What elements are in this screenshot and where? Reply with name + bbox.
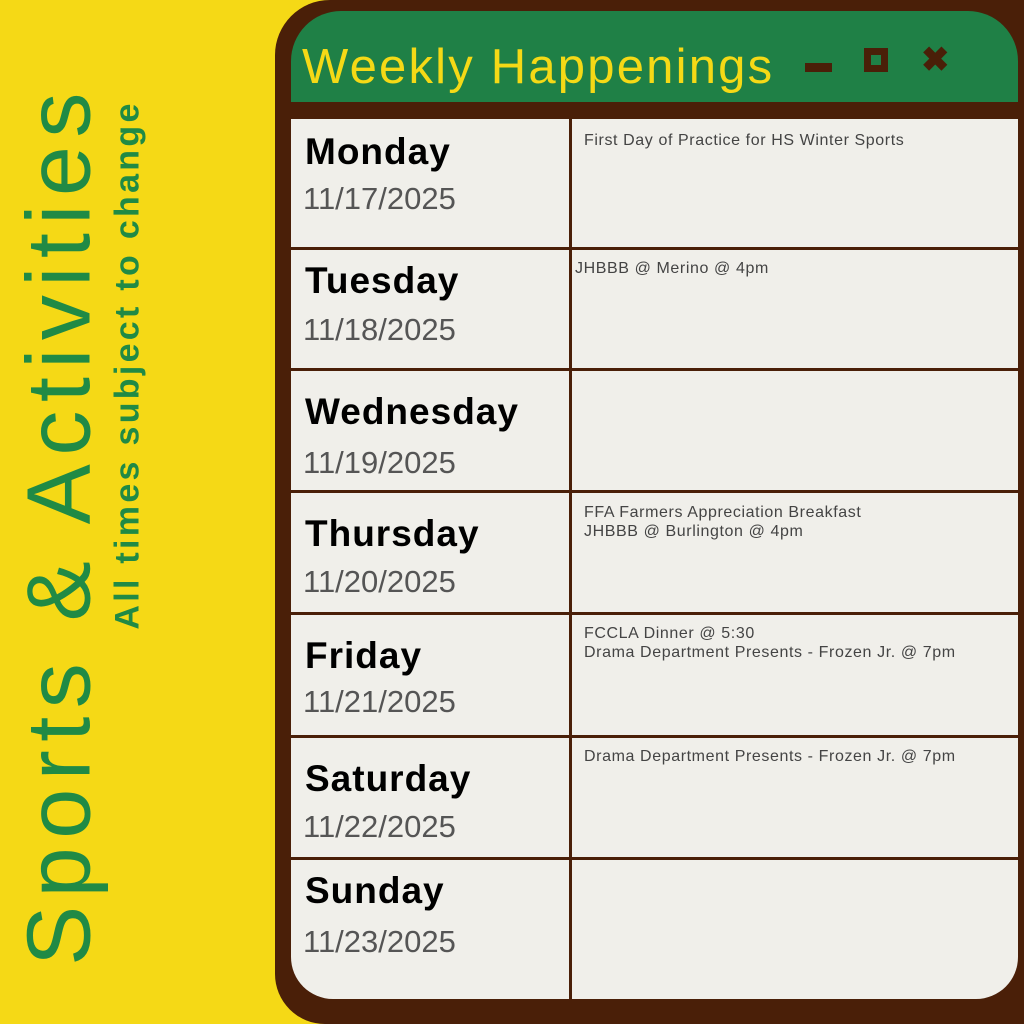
icon: minimize: [805, 63, 832, 72]
icon: maximize: [864, 48, 888, 72]
row: Monday: 11/17/2025: [303, 181, 456, 216]
icon: close: ✖: [921, 41, 950, 79]
row: Monday: Monday: [305, 131, 451, 172]
subtitle: All times subject to change: All times subject to change: [108, 100, 146, 630]
row: Thursday: 11/20/2025: [303, 564, 456, 599]
row: Monday: First Day of Practice for HS Winter Sports: [584, 132, 904, 149]
row: Tuesday: JHBBB @ Merino @ 4pm: [575, 260, 769, 277]
header bar: [291, 11, 1018, 102]
row: Sunday: Sunday: [305, 870, 445, 911]
row: Thursday: JHBBB @ Burlington @ 4pm: [584, 523, 803, 540]
row: Monday: [291, 119, 1018, 250]
row: Wednesday: Wednesday: [305, 391, 519, 432]
row: Friday: FCCLA Dinner @ 5:30: [584, 625, 755, 642]
row: Wednesday: 11/19/2025: [303, 445, 456, 480]
row: Wednesday: [291, 371, 1018, 493]
row: Tuesday: Tuesday: [305, 260, 459, 301]
row: Sunday: 11/23/2025: [303, 924, 456, 959]
row: Thursday: [291, 493, 1018, 615]
row: Tuesday: [291, 250, 1018, 371]
title: Sports & Activities: Sports & Activities: [10, 84, 110, 966]
row: Saturday: Saturday: [305, 758, 471, 799]
row: Sunday: [303, 870, 456, 959]
row: Saturday: Drama Department Presents - Frozen Jr. @ 7pm: [584, 748, 956, 765]
panel: window frame: [275, 0, 1024, 1024]
row: Friday: 11/21/2025: [303, 684, 456, 719]
row: Friday: Friday: [305, 635, 422, 676]
panel: schedule table: [291, 119, 1018, 999]
row: Saturday: [291, 738, 1018, 860]
row: Tuesday: 11/18/2025: [303, 312, 456, 347]
row: Thursday: Thursday: [305, 513, 480, 554]
heading: Weekly Happenings: Weekly Happenings: [302, 40, 774, 94]
row: Friday: [291, 615, 1018, 738]
row: Friday: Drama Department Presents - Frozen Jr. @ 7pm: [584, 644, 956, 661]
row: Thursday: FFA Farmers Appreciation Breakfast: [584, 504, 861, 521]
row: Saturday: 11/22/2025: [303, 809, 456, 844]
